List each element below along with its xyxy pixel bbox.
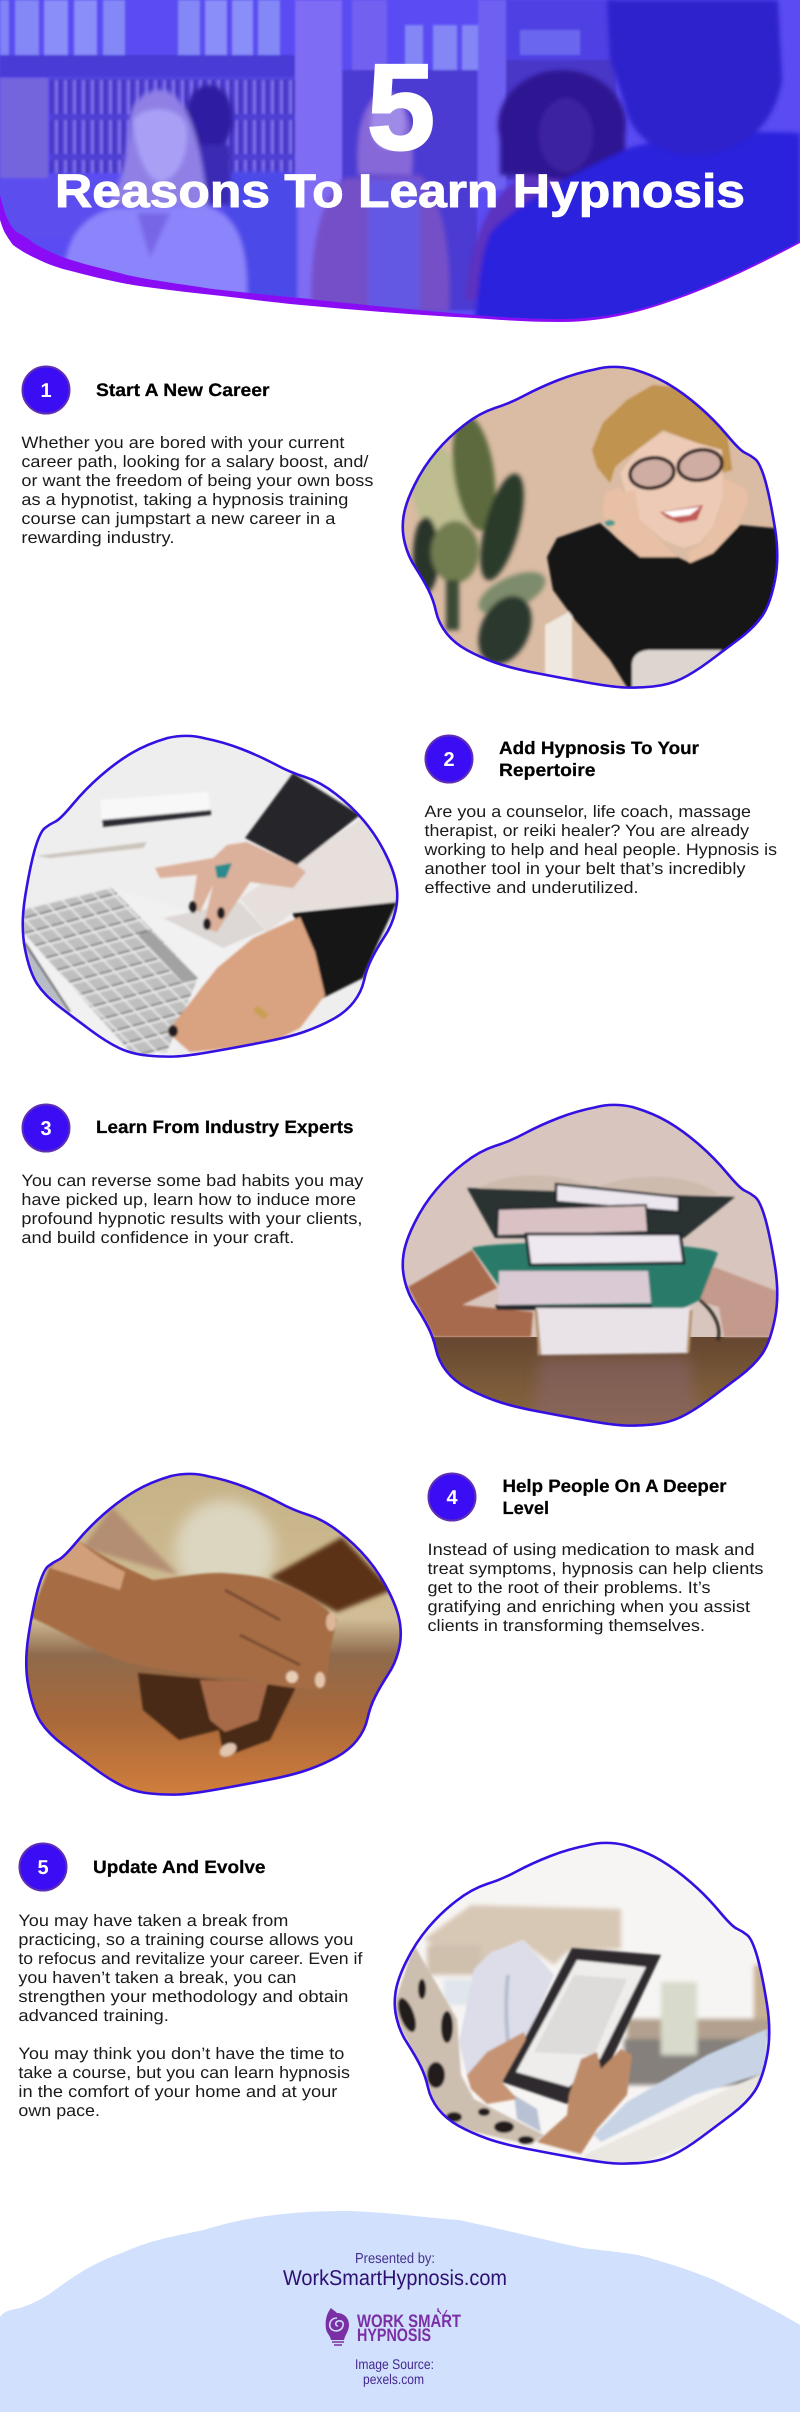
section 1: start a new career xyxy=(21,360,785,692)
header photo: group of people xyxy=(0,0,800,330)
company logo xyxy=(326,2308,461,2345)
body text 4: treat symptoms, hypnosis can help clients xyxy=(428,1560,764,1578)
body text 5: take a course, but you can learn hypnosis xyxy=(18,2064,350,2082)
body text 5: in the comfort of your home and at your xyxy=(18,2083,338,2101)
heading 3: Learn From Industry Experts xyxy=(96,1117,354,1137)
photo 1: smiling woman with glasses xyxy=(399,360,785,692)
logo icon: spiral light bulb xyxy=(326,2308,349,2345)
number badge 3 xyxy=(22,1104,70,1152)
image source label: Image Source: xyxy=(355,2356,434,2372)
body text 5: you haven’t taken a break, you can xyxy=(18,1969,296,1987)
man behind xyxy=(225,172,297,307)
section 3: learn from industry experts xyxy=(21,1100,785,1432)
body text 4: Instead of using medication to mask and xyxy=(428,1541,754,1559)
title text: Reasons To Learn Hypnosis xyxy=(55,164,745,217)
section 4: help people on a deeper level xyxy=(20,1470,764,1800)
heading 2: Add Hypnosis To Your xyxy=(499,738,699,758)
photo 5: person reading a tablet xyxy=(390,1838,775,2168)
body text 2: Are you a counselor, life coach, massage xyxy=(424,803,751,821)
body text 2: another tool in your belt that’s incredibly xyxy=(424,860,746,878)
body text 1: or want the freedom of being your own boss xyxy=(21,472,373,490)
logo rays xyxy=(438,2308,447,2315)
number badge 2: 2 xyxy=(443,749,455,771)
body text 5: strengthen your methodology and obtain xyxy=(18,1988,348,2006)
photo 2: hands on laptop xyxy=(18,730,403,1062)
body text 1 xyxy=(21,434,373,547)
body text 5: advanced training. xyxy=(18,2007,169,2025)
footer background shape xyxy=(0,2211,800,2412)
presented by label: Presented by: xyxy=(355,2251,435,2267)
section 2: add hypnosis to your repertoire xyxy=(18,730,777,1062)
photo 4: clasped hands xyxy=(20,1470,405,1800)
website name: WorkSmartHypnosis.com xyxy=(283,2266,507,2290)
body text 5: You may think you don’t have the time to xyxy=(18,2045,344,2063)
body text 2: working to help and heal people. Hypnosis is xyxy=(423,841,777,859)
body text 1: course can jumpstart a new career in a xyxy=(21,510,336,528)
body text 1: rewarding industry. xyxy=(21,529,174,547)
heading 1: Start A New Career xyxy=(96,380,270,400)
logo wordmark: WORK SMART xyxy=(357,2311,461,2331)
image source url: pexels.com xyxy=(363,2371,424,2387)
left woman xyxy=(105,90,208,205)
body text 1: career path, looking for a salary boost, and/ xyxy=(21,453,369,471)
number badge 2 xyxy=(426,736,472,782)
body text 2: effective and underutilized. xyxy=(424,879,638,897)
body text 3: You can reverse some bad habits you may xyxy=(21,1172,364,1190)
number badge 5: 5 xyxy=(37,1857,49,1879)
company logo: HYPNOSIS xyxy=(357,2325,431,2345)
title numeral: 5 xyxy=(367,39,435,175)
body text 1: Whether you are bored with your current xyxy=(21,434,345,452)
section 5: update and evolve xyxy=(18,1838,775,2168)
middle woman xyxy=(311,175,450,312)
header purple edge xyxy=(0,190,800,322)
right woman xyxy=(465,173,562,301)
foreground man xyxy=(474,132,800,330)
body text 4: clients in transforming themselves. xyxy=(428,1617,705,1635)
number badge 5 xyxy=(20,1844,66,1890)
heading 4 xyxy=(502,1476,726,1518)
photo 3: stack of books xyxy=(400,1100,785,1432)
heading 4: Help People On A Deeper xyxy=(502,1476,726,1496)
heading 2: Repertoire xyxy=(499,760,596,780)
body text 3: and build confidence in your craft. xyxy=(21,1229,294,1247)
number badge 4: 4 xyxy=(446,1487,458,1509)
heading 5: Update And Evolve xyxy=(93,1857,266,1877)
body text 4: get to the root of their problems. It’s xyxy=(428,1579,710,1597)
body text 2: therapist, or reiki healer? You are already xyxy=(424,822,750,840)
number badge 3: 3 xyxy=(40,1118,52,1140)
body text 5: You may have taken a break from xyxy=(18,1912,288,1930)
body text 5: own pace. xyxy=(18,2102,100,2120)
body text 5: to refocus and revitalize your career. Even if xyxy=(18,1950,363,1968)
body text 3: profound hypnotic results with your clients, xyxy=(21,1210,362,1228)
body text 4: gratifying and enriching when you assist xyxy=(428,1598,750,1616)
number badge 1 xyxy=(22,366,70,414)
footer panel xyxy=(0,2211,800,2412)
heading 2 xyxy=(499,738,699,780)
body text 2 xyxy=(423,803,777,897)
body text 5 xyxy=(18,1912,363,2120)
number badge 1: 1 xyxy=(40,380,52,402)
number badge 4 xyxy=(428,1474,476,1520)
body text 1: as a hypnotist, taking a hypnosis training xyxy=(21,491,348,509)
body text 5: practicing, so a training course allows you xyxy=(18,1931,353,1949)
body text 4 xyxy=(428,1541,764,1635)
body text 3 xyxy=(21,1172,364,1247)
header banner xyxy=(0,0,800,330)
heading 4: Level xyxy=(502,1498,549,1518)
body text 3: have picked up, learn how to induce more xyxy=(21,1191,356,1209)
